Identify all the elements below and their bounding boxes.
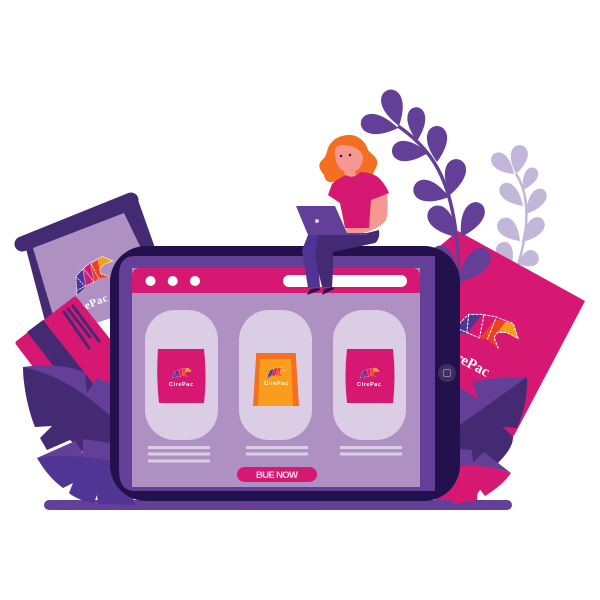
product card 2: CirePac bbox=[264, 381, 288, 387]
tablet bezel bbox=[119, 256, 435, 491]
shirt bbox=[328, 172, 389, 228]
product can bbox=[22, 200, 170, 340]
front leg bbox=[315, 230, 379, 287]
arm bbox=[345, 193, 388, 233]
hair bbox=[319, 135, 377, 182]
buy button bbox=[237, 467, 317, 482]
purple plant bbox=[361, 90, 491, 285]
product card 3 bbox=[333, 310, 406, 440]
laptop bbox=[296, 206, 367, 235]
product card 1 bbox=[145, 310, 218, 440]
buy button: BUE NOW bbox=[256, 470, 298, 481]
light plant bbox=[491, 145, 547, 266]
home button bbox=[438, 364, 456, 382]
credit card bbox=[18, 299, 150, 438]
base bar bbox=[44, 500, 512, 510]
product card 1: CirePac bbox=[169, 382, 193, 388]
tablet screen bbox=[132, 268, 420, 487]
browser header bbox=[132, 268, 420, 293]
description lines bbox=[148, 446, 402, 462]
sheet brand text: CirePac bbox=[439, 342, 492, 381]
can brand text: CirePac bbox=[67, 292, 110, 319]
product card 3: CirePac bbox=[357, 382, 381, 388]
eyes bbox=[340, 154, 351, 157]
pink sheet bbox=[435, 231, 585, 505]
left leaves bbox=[23, 366, 135, 505]
back leg bbox=[302, 235, 325, 288]
shoes bbox=[307, 287, 334, 295]
face and neck bbox=[335, 145, 363, 178]
logo on can bbox=[67, 253, 120, 295]
tablet bbox=[110, 246, 460, 501]
logo on pink sheet bbox=[451, 300, 523, 361]
right leaves bbox=[450, 377, 527, 504]
woman with laptop bbox=[296, 135, 389, 295]
product card 2 bbox=[239, 310, 312, 440]
